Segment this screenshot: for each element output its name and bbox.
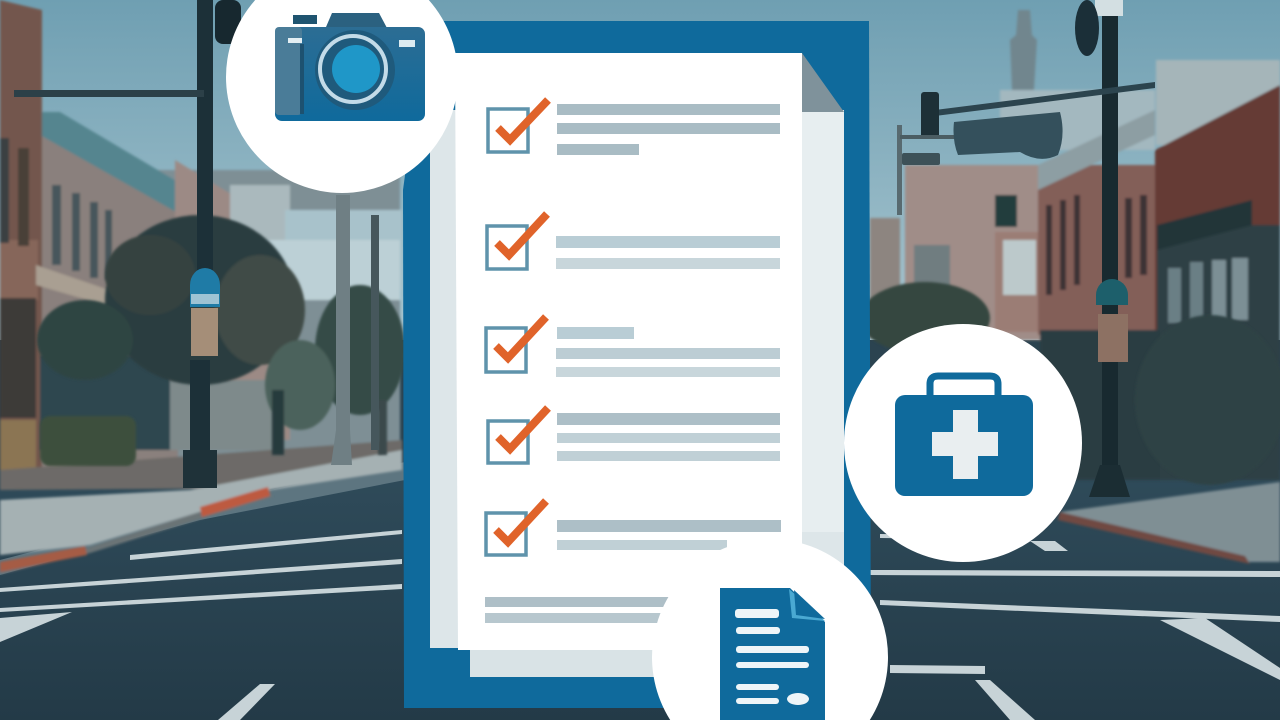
checklist footer lines <box>485 597 685 623</box>
left pole sign <box>190 268 220 356</box>
checklist rear page <box>430 110 844 677</box>
checklist item 2 <box>487 214 780 269</box>
icon: document in circle <box>652 539 888 720</box>
sky <box>0 0 1280 340</box>
right street pole and traffic signal <box>897 0 1155 497</box>
right street buildings <box>870 10 1280 564</box>
checklist item 5 <box>486 501 781 555</box>
icon: first aid kit in circle <box>844 324 1082 562</box>
left street buildings <box>0 0 402 574</box>
checklist item 1 <box>488 100 780 155</box>
left trees and hedge <box>37 215 405 466</box>
right trees <box>860 282 1280 485</box>
road surface <box>0 462 1280 720</box>
checklist item 4 <box>488 408 780 463</box>
left street poles <box>14 0 379 488</box>
checklist item 3 <box>486 317 780 377</box>
icon: camera in circle <box>226 0 458 193</box>
checklist front page <box>455 53 844 650</box>
blue clipboard backing <box>403 21 871 708</box>
road markings <box>0 530 1280 720</box>
